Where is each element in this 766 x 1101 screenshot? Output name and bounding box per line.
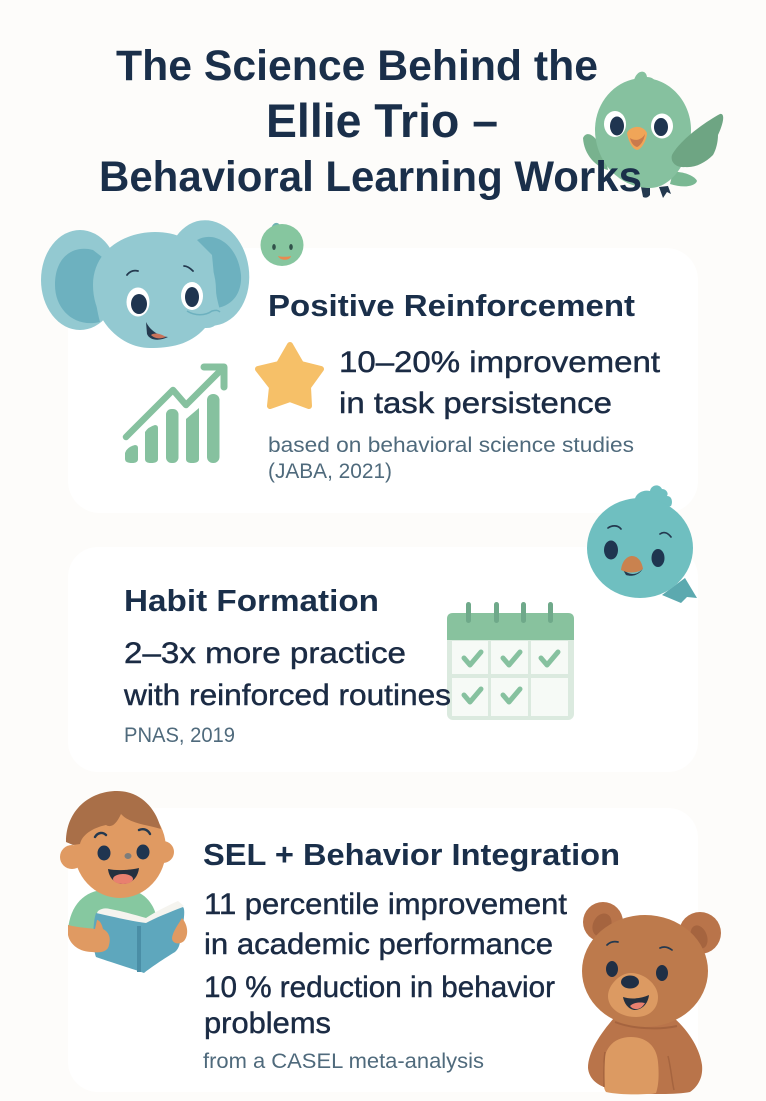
text: task persistence stat: in task persistence: [339, 387, 612, 420]
heading: positive reinforcement: Positive Reinforcement: [268, 288, 635, 323]
title: Behavioral Learning Works: [99, 153, 642, 201]
icon: teal bird: [587, 485, 697, 603]
text: source note, JABA: [268, 434, 634, 483]
icon: star: [258, 345, 321, 406]
title: The Science Behind the: [116, 42, 598, 90]
panel: SEL and behavior integration: [68, 808, 698, 1092]
text: practice stat: 2–3x more practice: [124, 637, 406, 670]
title: [99, 42, 642, 201]
text: task persistence stat: [339, 346, 661, 420]
text: task persistence stat: 10–20% improvement: [339, 346, 661, 379]
icon: boy reading: [60, 791, 187, 973]
text: SEL stats: problems: [204, 1007, 331, 1040]
text: source note, JABA: based on behavioral science studies: [268, 434, 634, 457]
icon: green bird: [583, 72, 723, 198]
text: source note, PNAS: PNAS, 2019: [124, 724, 235, 747]
panel: habit formation: [68, 547, 698, 772]
text: source note, JABA: (JABA, 2021): [268, 460, 392, 483]
text: SEL stats: [204, 888, 568, 1040]
text: practice stat: [123, 637, 451, 712]
icon: habit calendar: [447, 602, 574, 720]
title: Ellie Trio –: [266, 94, 498, 147]
icon: growth chart: [125, 367, 224, 463]
icon: elephant: [41, 215, 256, 348]
heading: SEL and behavior integration: SEL + Behavior Integration: [203, 837, 620, 872]
text: practice stat: with reinforced routines: [123, 679, 451, 712]
text: SEL stats: in academic performance: [204, 928, 553, 961]
text: source note, CASEL: from a CASEL meta-analysis: [203, 1050, 484, 1073]
icon: bear: [582, 902, 721, 1094]
icon: small green bird: [260, 223, 304, 266]
text: SEL stats: 11 percentile improvement: [204, 888, 568, 921]
heading: habit formation: Habit Formation: [124, 583, 379, 618]
text: SEL stats: 10 % reduction in behavior: [204, 971, 555, 1004]
panel: positive reinforcement: [68, 248, 698, 513]
